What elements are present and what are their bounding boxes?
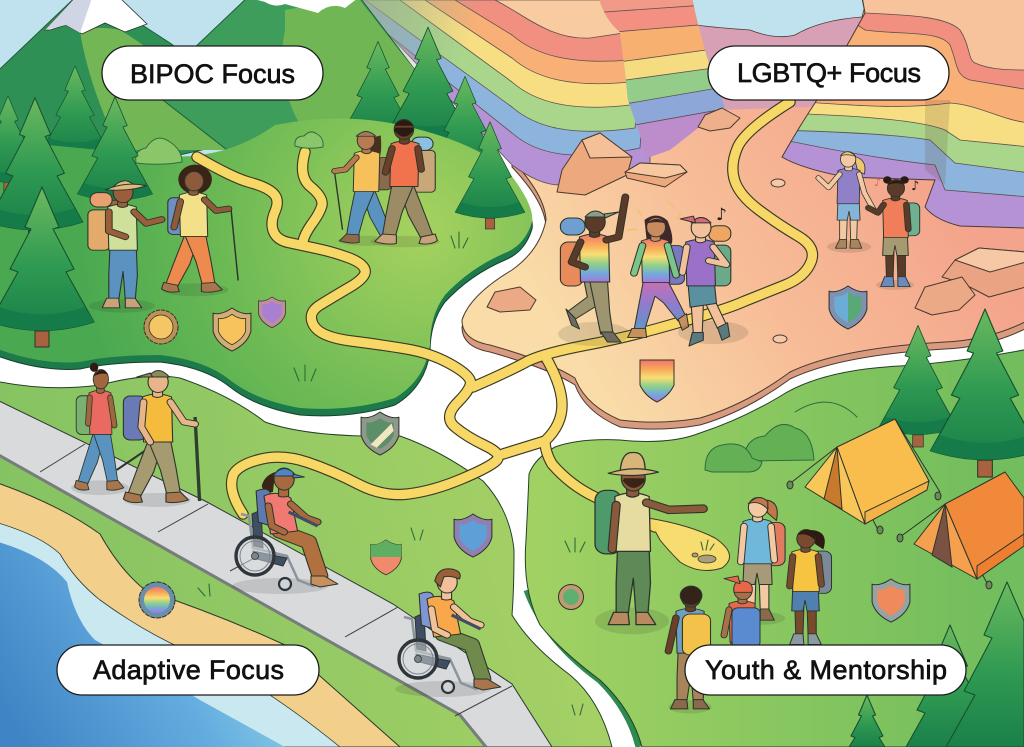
trees: foreground lower right xyxy=(849,582,1024,747)
mountain: right with snow cap xyxy=(150,0,460,160)
label: Adaptive Focus: Adaptive Focus xyxy=(93,655,284,685)
hiker: woman with bun in coral shirt xyxy=(71,363,129,495)
wheelchair user: man in orange shirt xyxy=(395,569,501,697)
peach canyon ground xyxy=(462,0,1024,429)
hiker: man with orange shirt and blue roll xyxy=(370,120,440,247)
shallow water xyxy=(0,522,340,747)
badge: purple shield xyxy=(258,297,286,328)
rainbow rock pillar xyxy=(600,0,725,158)
hiker: rainbow outfit woman xyxy=(628,215,689,338)
label: Youth & Mentorship xyxy=(685,645,966,695)
grass tufts and hill line xyxy=(198,232,857,715)
badge: green medal xyxy=(558,584,584,610)
panel: youth camp meadow xyxy=(525,349,1024,747)
hiker: boy in pink cap and purple shirt xyxy=(678,216,748,346)
tent: yellow xyxy=(787,419,941,534)
hiker: rainbow shirt man waving xyxy=(558,197,630,346)
rocks xyxy=(487,108,1024,343)
trees around the youth camp xyxy=(878,309,1024,477)
badge: gold shield xyxy=(213,308,251,351)
youth: girl with yellow shirt xyxy=(790,530,832,644)
rainbow canyon wall, right xyxy=(775,0,1024,235)
far canyon and sky, right xyxy=(690,0,870,110)
youth: boy seen from behind with yellow pack xyxy=(668,586,712,714)
badge: blue and green shield xyxy=(829,286,867,329)
hiker: young girl with hair buns xyxy=(868,176,920,290)
trees behind the BIPOC meadow xyxy=(44,27,499,182)
label: Youth & Mentorship: Youth & Mentorship xyxy=(705,655,947,685)
bushes xyxy=(136,132,814,472)
music notes and cheer marks: ♪ xyxy=(874,176,881,189)
label: Adaptive Focus xyxy=(57,645,319,695)
youth: boy with red cap and blue pack xyxy=(724,576,760,694)
yellow trail network xyxy=(197,102,812,570)
label: BIPOC Focus xyxy=(102,46,323,100)
trees around the BIPOC meadow xyxy=(0,96,525,347)
badge: blue shield xyxy=(454,514,492,557)
hiker: blonde woman xyxy=(818,152,874,253)
mountain: left with snow cap xyxy=(0,0,290,200)
music notes and cheer marks xyxy=(627,176,919,230)
badge: green striped shield xyxy=(361,412,399,455)
panel: adaptive meadow xyxy=(0,376,612,747)
hiker: man with sun hat and large pack xyxy=(88,181,162,313)
music notes and cheer marks: ♪ xyxy=(911,179,919,194)
panel: BIPOC meadow xyxy=(0,118,532,416)
ranger guide with pointing arm xyxy=(595,453,703,634)
sky xyxy=(0,0,400,160)
label: LGBTQ+ Focus: LGBTQ+ Focus xyxy=(737,58,921,88)
hiker: woman with brim hat and pole xyxy=(335,132,396,246)
youth: girl with ponytail xyxy=(738,497,785,625)
beach sand xyxy=(0,482,400,747)
wheelchair user: woman in blue cap xyxy=(232,468,338,594)
badge: medal sun xyxy=(144,310,178,344)
badge: sunset medal xyxy=(139,582,175,618)
deep water xyxy=(0,541,285,747)
hiker: woman with afro and trekking pole xyxy=(162,165,238,296)
rainbow canyon wall, left xyxy=(345,0,650,185)
badge: green and coral shield xyxy=(371,540,401,575)
badge: coral shield xyxy=(872,579,910,622)
badge: rainbow shield xyxy=(640,360,674,402)
label: BIPOC Focus: BIPOC Focus xyxy=(130,59,295,89)
label: LGBTQ+ Focus xyxy=(708,46,949,100)
tent: orange xyxy=(897,472,1024,589)
hiker: man in cap with trekking poles xyxy=(117,370,200,507)
paved accessible sidewalk xyxy=(0,399,552,747)
music notes and cheer marks: ♪ xyxy=(716,205,727,225)
